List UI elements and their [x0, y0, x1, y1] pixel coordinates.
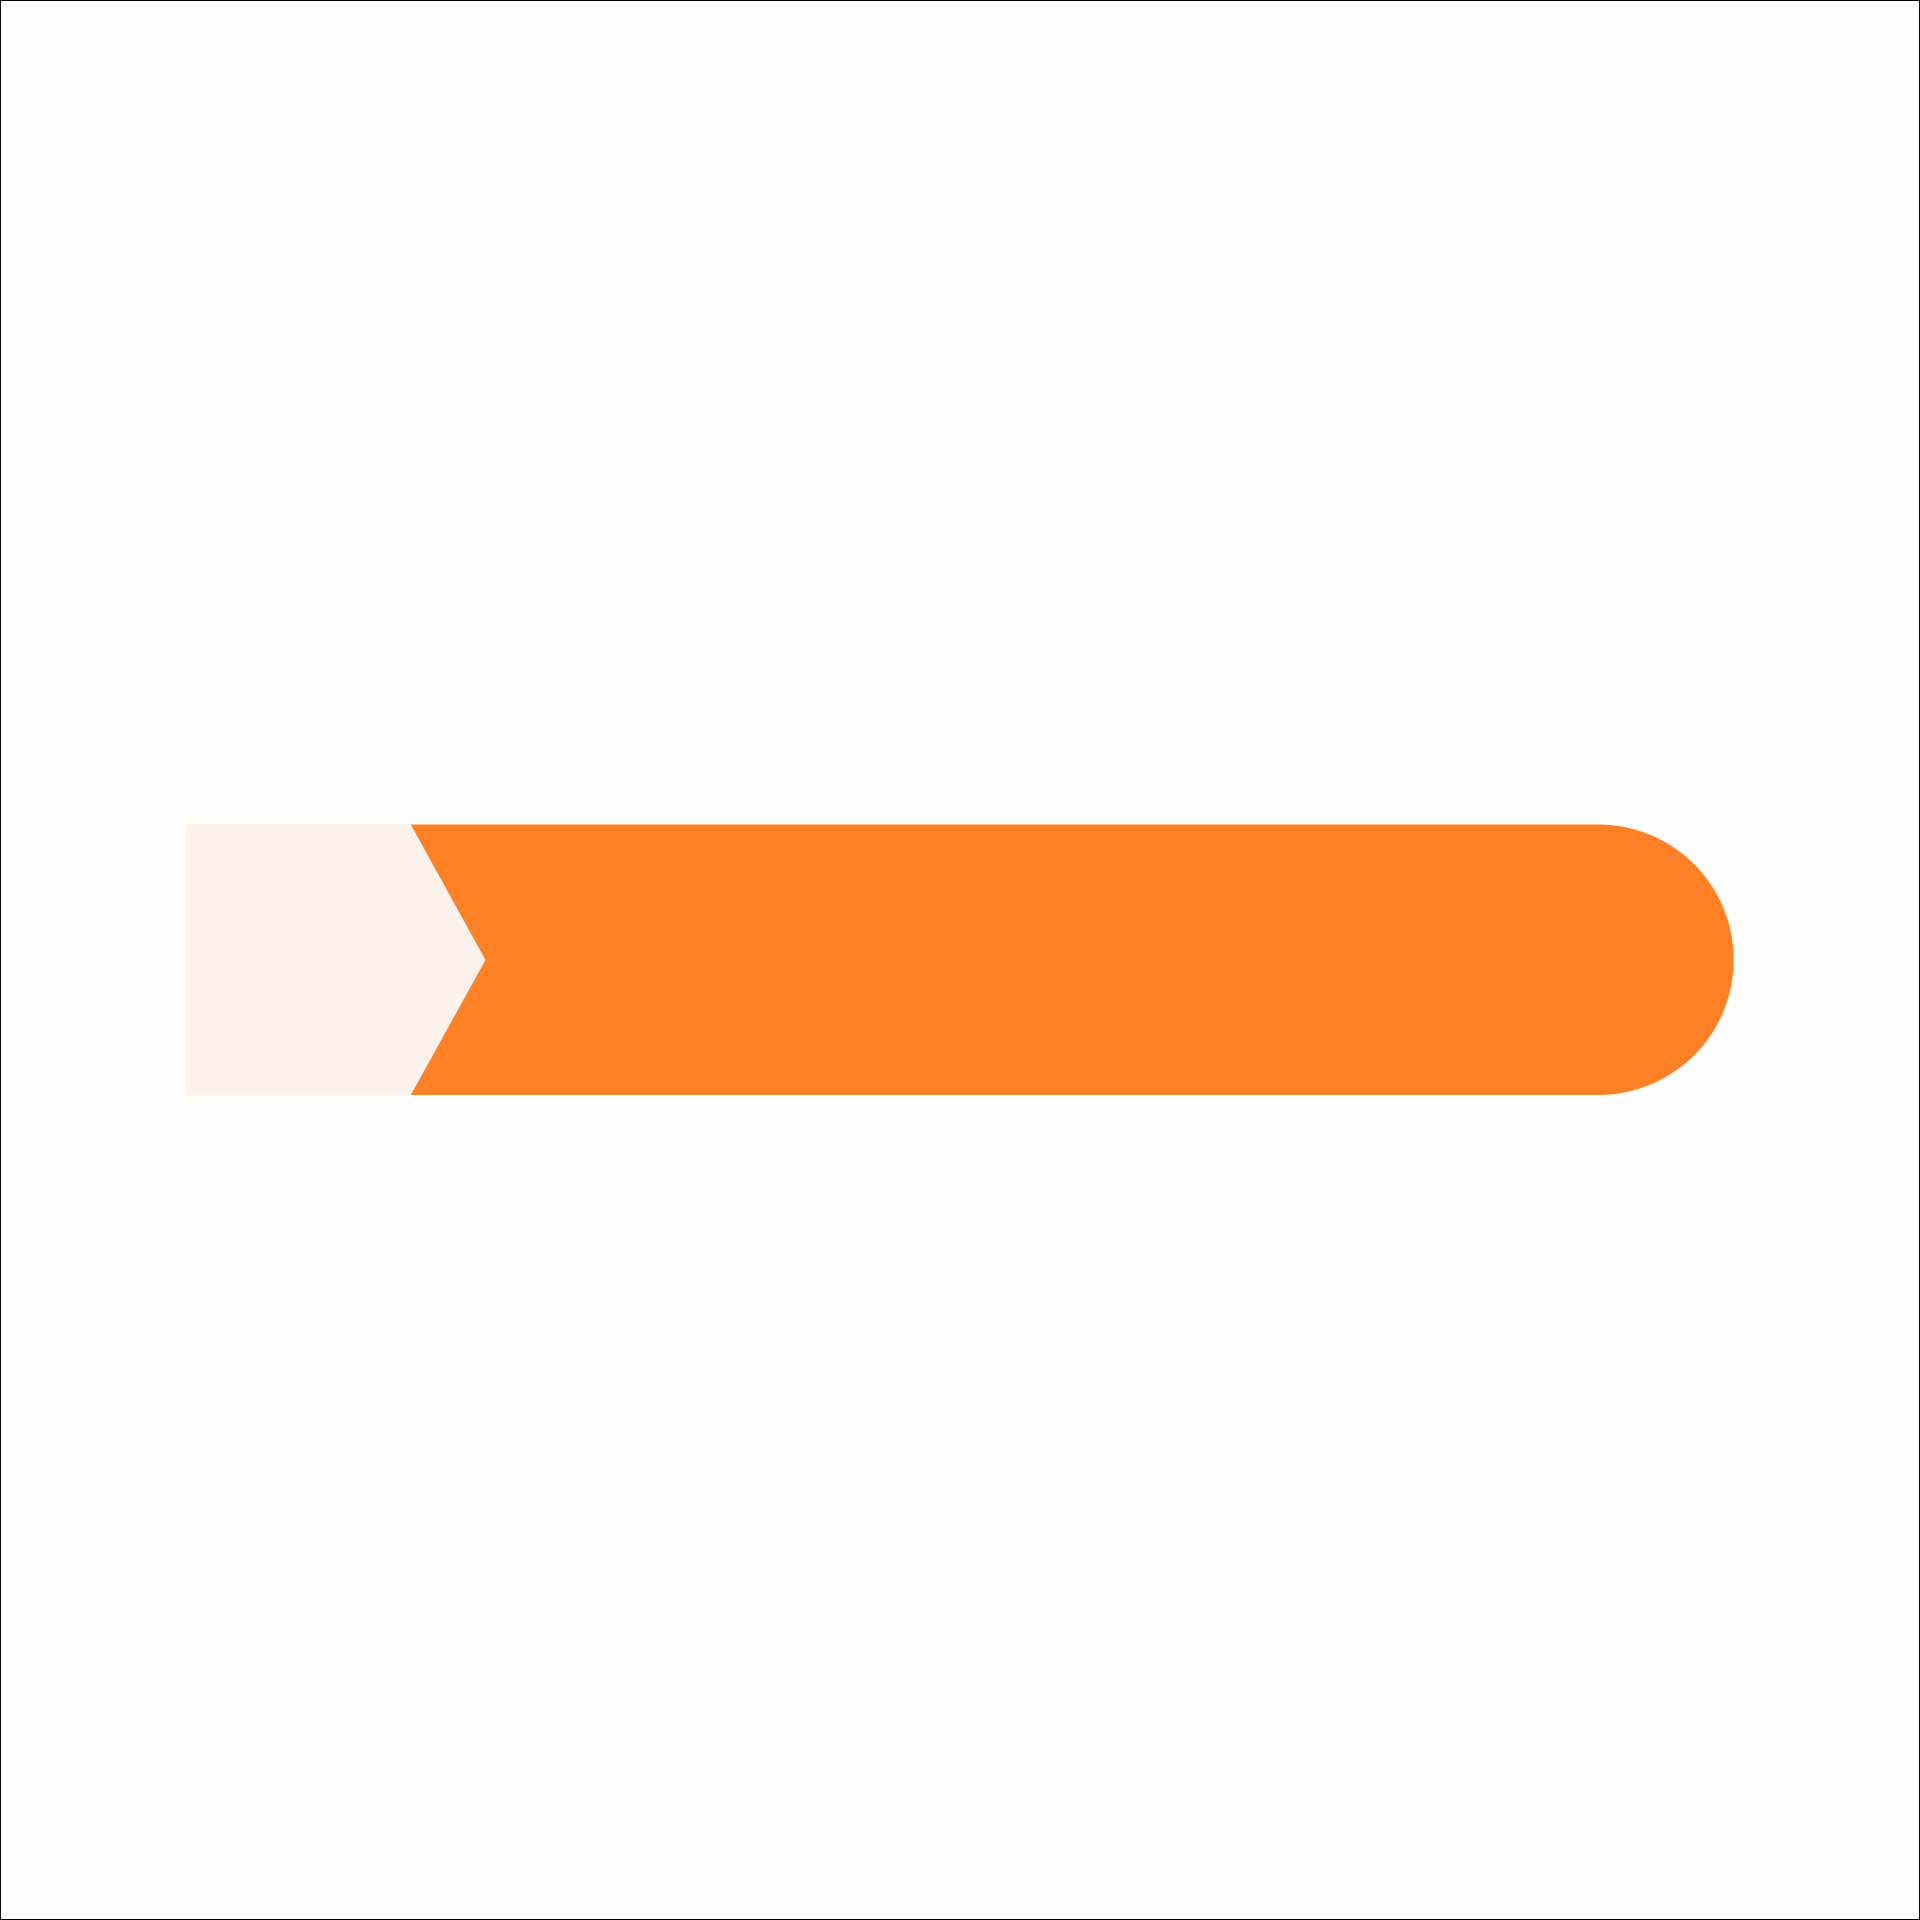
orange rounded bar — [410, 824, 1734, 1095]
cream arrow tab — [186, 824, 486, 1096]
